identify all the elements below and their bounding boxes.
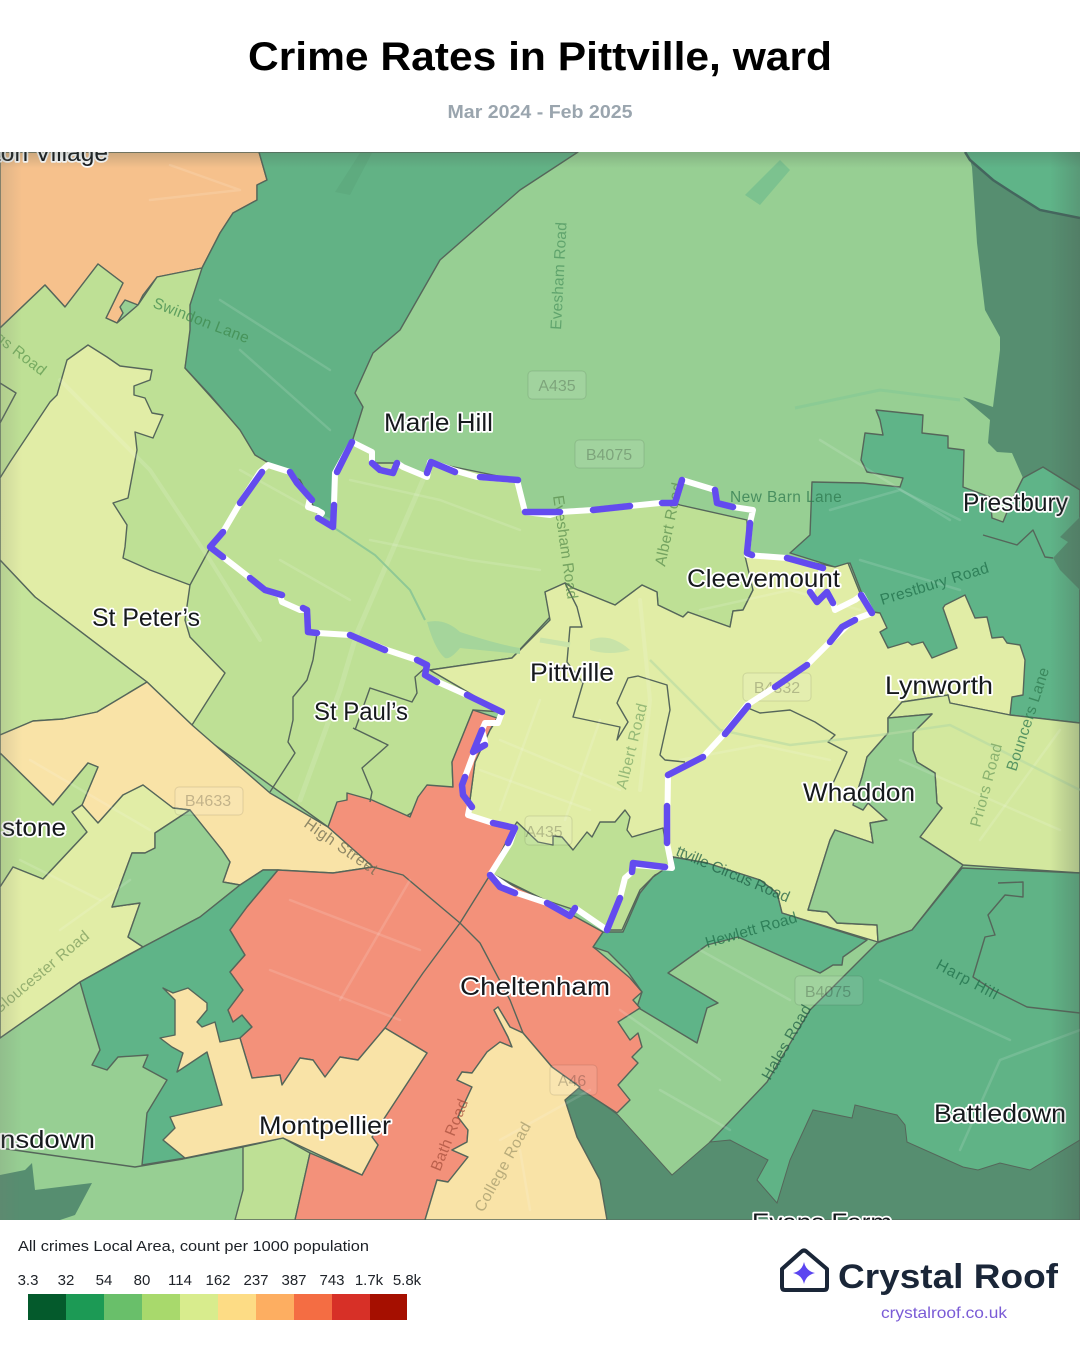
- region: yellow Pittville ward and neighbours: [430, 556, 1025, 942]
- ward labels: Prestbury: [963, 489, 1068, 517]
- region: pale green south Pittville: [490, 810, 670, 930]
- ward boundary: purple dashes: [210, 442, 872, 930]
- ward labels: Montpellier: [259, 1112, 391, 1140]
- region: very dark green east corner: [1053, 517, 1080, 590]
- region: mid green Whaddon island: [808, 714, 963, 942]
- ward labels: stone: [2, 814, 66, 842]
- ward labels: Marle Hill: [384, 409, 493, 437]
- legend scale labels: 114: [168, 1272, 192, 1289]
- road shields: A46: [558, 1073, 586, 1090]
- road shields: [175, 371, 863, 1095]
- line: north-east dark boundary: [965, 152, 1080, 218]
- ward labels: Lynworth: [885, 672, 993, 700]
- road labels: New Barn Lane: [730, 489, 842, 506]
- legend title: All crimes Local Area, count per 1000 population: [18, 1238, 369, 1255]
- ward labels: Cleevemount: [687, 565, 840, 593]
- legend scale labels: [18, 1272, 422, 1289]
- road labels: High Street: [301, 815, 381, 879]
- line: Lansdown boundary: [0, 1147, 243, 1167]
- road labels: Prestbury Road: [878, 560, 991, 609]
- region: pale green Leckhampton stone: [0, 753, 98, 887]
- road labels: Bath Road: [428, 1097, 472, 1173]
- region: light green Lynworth south: [888, 695, 1080, 873]
- road shields: B4075: [586, 447, 632, 464]
- region: dark green Lansdown: [80, 870, 278, 1165]
- region: pale green Marle Hill and St Paul's: [0, 264, 753, 827]
- road shields: A435: [525, 824, 563, 841]
- road labels: Swindon Lane: [151, 295, 252, 347]
- region: pale yellow St Peter's: [0, 345, 225, 725]
- road labels: [0, 221, 1053, 1215]
- ward labels: St Peter’s: [92, 604, 200, 632]
- ward labels: Evans Farm: [752, 1209, 892, 1237]
- logo: Crystal Roof house icon: [782, 1250, 827, 1290]
- road shields: A435: [538, 378, 576, 395]
- region: dark green corner south-west: [0, 1163, 92, 1220]
- logo wordmark: Crystal Roof: [838, 1258, 1059, 1296]
- lines: salmon inner boundaries: [373, 867, 523, 1033]
- road labels: Hewlett Road: [703, 909, 799, 952]
- region: green Battledown: [700, 868, 1080, 1220]
- title: Crime Rates in Pittville, ward: [248, 35, 832, 79]
- ward labels: St Paul’s: [314, 698, 408, 726]
- ward labels: Battledown: [934, 1100, 1066, 1128]
- legend scale labels: 80: [134, 1272, 150, 1289]
- road labels: Hales Road: [759, 1002, 815, 1083]
- road labels: Albert Road: [652, 481, 687, 568]
- region: dark green Evans Farm: [565, 1087, 1080, 1220]
- region: mid green Rowanfield: [112, 810, 240, 947]
- road network: [20, 165, 1080, 1210]
- legend scale labels: 54: [96, 1272, 112, 1289]
- ward labels: Cheltenham: [460, 973, 610, 1001]
- website link: crystalroof.co.uk: [881, 1305, 1008, 1322]
- region: cream College Road: [425, 1007, 607, 1220]
- road labels: ttville Circus Road: [673, 843, 792, 906]
- legend scale labels: 162: [205, 1272, 231, 1289]
- road labels: Evesham Road: [548, 221, 571, 330]
- region: orange slivers west: [0, 383, 16, 478]
- region: pale green south: [235, 1138, 310, 1220]
- region: green north-east top: [965, 152, 1080, 218]
- legend scale labels: 32: [58, 1272, 74, 1289]
- region: green Pittville Circus: [593, 857, 867, 1043]
- road shields: B4633: [185, 793, 231, 810]
- ward labels: Whaddon: [803, 779, 915, 807]
- ward boundary: white base line: [210, 442, 872, 930]
- road shields: B4332: [754, 680, 800, 697]
- region: very dark green north-east: [963, 160, 1080, 490]
- road labels: Harp Hill: [933, 957, 1001, 1003]
- road labels: Evesham Road: [549, 494, 580, 601]
- legend scale labels: 387: [281, 1272, 307, 1289]
- region: pale green west strip: [0, 560, 147, 735]
- legend scale labels: 5.8k: [393, 1272, 422, 1289]
- region: yellow Gloucester Road: [0, 785, 190, 1038]
- legend scale labels: 1.7k: [355, 1272, 384, 1289]
- road labels: College Road: [472, 1119, 535, 1215]
- region: salmon town centre: [228, 710, 642, 1220]
- region: cream Montpellier: [160, 988, 427, 1175]
- ward labels: Pittville: [530, 659, 614, 687]
- legend scale labels: 743: [319, 1272, 345, 1289]
- lines: inner ward boundaries: [190, 530, 1053, 802]
- legend colour bar: [28, 1294, 407, 1320]
- region: green Prestbury: [790, 410, 1080, 723]
- legend scale labels: 237: [243, 1272, 269, 1289]
- map edge shading: [0, 152, 1080, 1220]
- ward labels: nsdown: [0, 1126, 95, 1154]
- region: cream High Street: [0, 682, 373, 885]
- water: Pittville lake and brook: [333, 153, 1080, 790]
- road labels: Bouncers Lane: [1004, 665, 1053, 773]
- line: Harp Hill ward boundary: [973, 882, 1080, 1013]
- subtitle: date range: Mar 2024 - Feb 2025: [448, 102, 632, 122]
- road shields: B4075: [805, 984, 851, 1001]
- road labels: Albert Road: [613, 701, 651, 791]
- region: orange north-west: [0, 152, 267, 328]
- legend scale labels: 3.3: [18, 1272, 38, 1289]
- road labels: Priors Road: [967, 742, 1006, 829]
- region: dark green Swindon: [185, 152, 578, 527]
